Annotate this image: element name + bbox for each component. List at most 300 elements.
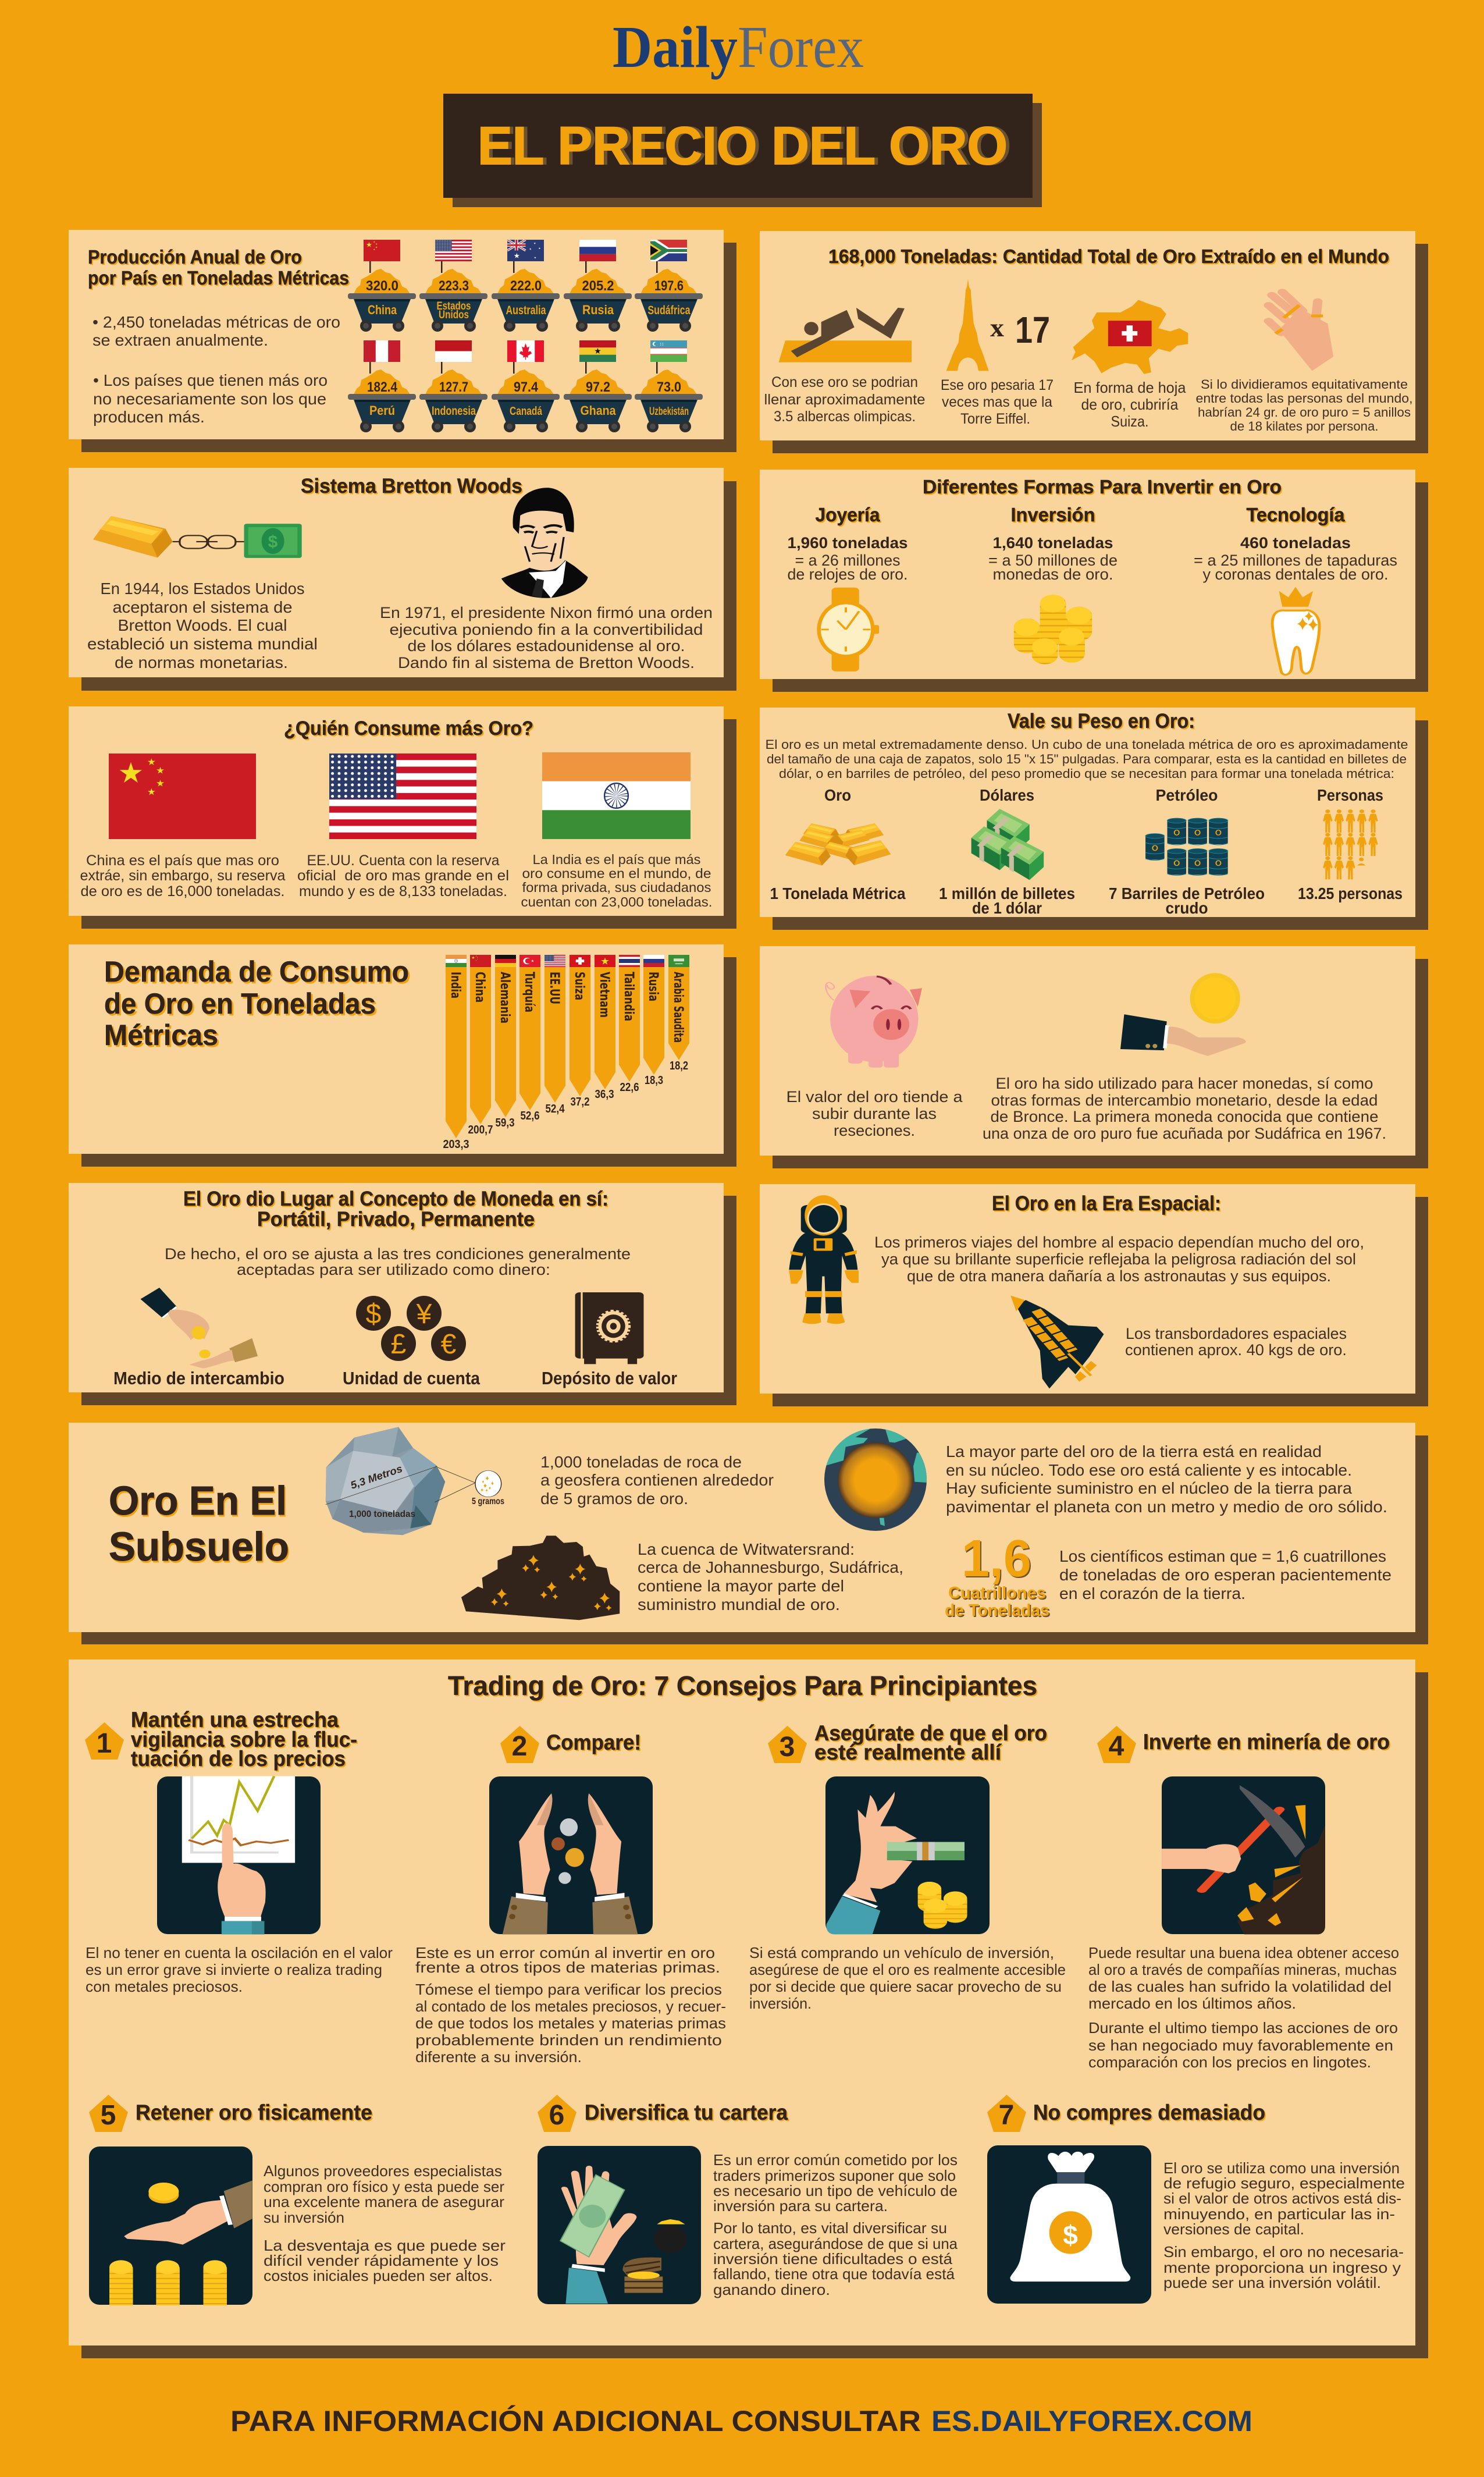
panel: diferentes formas de invertir <box>760 470 1428 692</box>
bar: Vietnam <box>595 955 615 1101</box>
tip 4 text: Puede resultar una buena idea obtener acceso <box>1088 1944 1399 1961</box>
tip 5 text: su inversión <box>264 2209 344 2226</box>
cart: China: 320.0 <box>366 278 398 294</box>
badge 3: 3 <box>780 1732 795 1762</box>
badge 7: 7 <box>999 2100 1014 2131</box>
label: depósito de valor: Depósito de valor <box>542 1368 677 1388</box>
bar: Rusia: Rusia <box>646 972 660 1001</box>
cart: China <box>348 240 416 332</box>
text block: 1944: de normas monetarias. <box>115 653 288 671</box>
bar: Arabia Saudita: Arabia Saudita <box>671 972 685 1043</box>
icon: currency coins: ¥ <box>416 1299 432 1330</box>
text block: EE.UU.: mundo y es de 8,133 toneladas. <box>299 883 507 900</box>
column: tecnología: = a 25 millones de tapaduras <box>1194 552 1397 569</box>
text block: transbordadores: contienen aprox. 40 kgs de oro. <box>1125 1341 1347 1359</box>
bar: Vietnam: Vietnam <box>597 972 611 1018</box>
cart: Uzbekistán: 73.0 <box>657 379 681 395</box>
text block: núcleo: en su núcleo. Todo ese oro está caliente y es intocable. <box>946 1461 1352 1479</box>
icon: earth with gold core <box>823 1427 930 1531</box>
text block: viajes al espacio <box>874 1234 1364 1285</box>
tip 7 text: puede ser una inversión volátil. <box>1163 2274 1381 2291</box>
label: x 17: x <box>990 314 1004 342</box>
heading: concepto de moneda: El Oro dio Lugar al Concepto de Moneda en sí: <box>183 1188 608 1210</box>
bar: Turquía: 52,6 <box>520 1110 540 1122</box>
bar: Turquía <box>519 955 540 1122</box>
column: oro <box>770 786 906 902</box>
cart: Canadá: Canadá <box>510 405 543 418</box>
text block: 1944: estableció un sistema mundial <box>87 635 318 653</box>
cart: Australia: Australia <box>506 304 546 317</box>
tip 7 text: mente proporciona un ingreso y <box>1163 2259 1401 2276</box>
text block: densidad del oro: del tamaño de una caja de zapatos, solo 15 "x 15" pulgadas. Para comparar, esta es la cantidad en billetes de <box>767 752 1407 766</box>
tip 7 text: minuyendo, en particular las in- <box>1163 2205 1395 2223</box>
bar: India: India <box>448 972 462 998</box>
text block: Witwatersrand: suministro mundial de oro. <box>638 1595 840 1614</box>
column: joyería: 1,960 toneladas <box>788 534 908 552</box>
badge 7 <box>987 2095 1026 2132</box>
text block: 1944: aceptaron el sistema de <box>113 598 292 616</box>
heading: quién consume: ¿Quién Consume más Oro? <box>284 717 533 740</box>
panel: valor del oro y monedas <box>760 946 1428 1168</box>
cart: Rusia <box>564 240 632 332</box>
icon: rock with 5 grams of gold: 5 gramos <box>472 1497 504 1506</box>
text block: Witwatersrand: cerca de Johannesburgo, Sudáfrica, <box>638 1558 903 1576</box>
text block: 1971 <box>380 604 713 671</box>
heading: demanda de consumo: de Oro en Toneladas <box>104 987 376 1020</box>
text block: Suiza: de oro, cubriría <box>1081 396 1179 413</box>
icon: hands and coins <box>489 1776 653 1934</box>
bar: India: 203,3 <box>443 1138 469 1151</box>
badge 6 <box>538 2095 576 2132</box>
column: petróleo: 7 Barriles de Petróleo <box>1109 884 1265 902</box>
text block: núcleo: Hay suficiente suministro en el núcleo de la tierra para <box>946 1479 1352 1497</box>
label: x 17: 17 <box>1015 309 1050 351</box>
text block: Witwatersrand <box>638 1540 903 1614</box>
panel: 168,000 toneladas <box>760 231 1428 453</box>
text block: recesiones: subir durante las <box>812 1105 937 1122</box>
cart: Perú <box>348 340 416 432</box>
text block: 1944: En 1944, los Estados Unidos <box>100 580 305 598</box>
tip 6 text: ganando dinero. <box>713 2281 830 2298</box>
column: inversión: Inversión <box>1011 504 1095 525</box>
icon: piggy bank <box>825 976 922 1068</box>
heading: vale su peso: Vale su Peso en Oro: <box>1008 710 1195 733</box>
panel: oro en la era espacial <box>760 1184 1428 1406</box>
tip 2 <box>415 1726 726 2066</box>
icon: portrait of Nixon <box>501 488 588 598</box>
column: dólares: Dólares <box>980 786 1034 804</box>
column: joyería: = a 26 millones <box>795 552 901 569</box>
icon: gold bar chained to dollar <box>93 516 302 558</box>
column: tecnología: 460 toneladas <box>1240 534 1351 552</box>
title banner <box>443 94 1042 207</box>
tip 2 text: Tómese el tiempo para verificar los precios <box>415 1981 722 1998</box>
text block: Torre Eiffel <box>941 377 1054 427</box>
bar: Arabia Saudita <box>668 955 689 1072</box>
tip 5 text: difícil vender rápidamente y los <box>264 2252 499 2269</box>
tip 5 text: una excelente manera de asegurar <box>264 2193 504 2211</box>
text block: tres condiciones <box>165 1245 631 1278</box>
column: dólares: de 1 dólar <box>972 899 1042 917</box>
text block: EE.UU.: EE.UU. Cuenta con la reserva <box>307 852 500 869</box>
logo: DailyForex <box>613 15 864 80</box>
heading: producción anual: Producción Anual de Oro <box>88 246 302 268</box>
icon: rock with 5 grams of gold <box>326 1427 504 1535</box>
cart: Indonesia: 127.7 <box>439 379 468 395</box>
tip 1 title: Mantén una estrecha <box>131 1708 339 1732</box>
text block: producción bullets: • 2,450 toneladas métricas de oro <box>92 313 340 331</box>
cart: Estados Unidos: Unidos <box>439 309 469 321</box>
tip 4 text <box>1088 1944 1399 2071</box>
bar: India <box>443 955 469 1151</box>
column: joyería: de relojes de oro. <box>788 566 908 583</box>
text block: China: de oro es de 16,000 toneladas. <box>80 883 285 900</box>
chart: mine carts by country <box>348 240 703 432</box>
text block: científicos: de toneladas de oro esperan pacientemente <box>1059 1566 1392 1584</box>
icon: finger on price chart <box>157 1776 321 1934</box>
text block: monedas: El oro ha sido utilizado para hacer monedas, sí como <box>996 1075 1373 1092</box>
label: medio de intercambio: Medio de intercambio <box>113 1368 284 1388</box>
cart: Indonesia <box>419 340 487 432</box>
text block: densidad del oro: dólar, o en barriles de petróleo, del peso promedio que se necesitan para formar una tonelada métrica: <box>779 766 1394 781</box>
text block: China <box>80 852 286 900</box>
tip 4 text: mercado en los últimos años. <box>1088 1995 1296 2012</box>
footer call to action <box>230 2405 1252 2437</box>
tip 2 text: al contado de los metales preciosos, y recuer- <box>415 1998 726 2015</box>
tip 2 text: Este es un error común al invertir en oro <box>415 1944 715 1961</box>
cart: Ghana <box>564 340 632 432</box>
icon: gold bars <box>785 823 891 865</box>
flag: India <box>542 752 691 839</box>
heading: oro en el subsuelo: Subsuelo <box>109 1524 289 1569</box>
tip 6 text: traders primerizos suponer que solo <box>713 2167 956 2184</box>
icon: currency coins: € <box>441 1329 457 1360</box>
cart: Estados Unidos: Estados <box>436 300 471 312</box>
panel: concepto de moneda <box>69 1183 736 1405</box>
cart: Perú: 182.4 <box>367 379 398 395</box>
bar: Tailandia <box>619 955 640 1094</box>
text block: China: China es el país que mas oro <box>86 852 279 869</box>
bar: Arabia Saudita: 18,2 <box>670 1060 688 1072</box>
text block: geosfera <box>540 1453 774 1508</box>
cart: China: China <box>368 303 397 317</box>
tip 6 text: fallando, tiene otra que todavía está <box>713 2265 955 2283</box>
tip 6 title: Diversifica tu cartera <box>585 2101 788 2124</box>
text block: recesiones <box>787 1088 963 1139</box>
bar: Rusia: 18,3 <box>645 1074 663 1087</box>
text block: 1944: Bretton Woods. El cual <box>118 616 287 634</box>
column: inversión: 1,640 toneladas <box>992 534 1113 552</box>
heading: concepto de moneda: Portátil, Privado, Permanente <box>257 1208 535 1231</box>
cart: Estados Unidos <box>419 240 487 332</box>
tip 6 text <box>713 2151 958 2298</box>
tip 7 <box>987 2095 1405 2304</box>
column: inversión: = a 50 millones de <box>988 552 1118 569</box>
bar: Suiza <box>570 955 590 1108</box>
tip 3 <box>749 1721 1066 2012</box>
text block: anillos: habrían 24 gr. de oro puro = 5 anillos <box>1198 405 1411 420</box>
text block: geosfera: de 5 gramos de oro. <box>540 1490 688 1508</box>
cart: Australia <box>492 240 560 332</box>
logo: DailyForex: Forex <box>738 15 864 80</box>
tip 7 text: Sin embargo, el oro no necesaria- <box>1163 2243 1404 2261</box>
tip 5 <box>89 2095 506 2305</box>
text block: anillos: entre todas las personas del mundo, <box>1196 391 1412 406</box>
heading: oro en el subsuelo: Oro En El <box>109 1478 287 1523</box>
icon: money bag: $ <box>1063 2220 1078 2250</box>
panel: producción anual <box>69 230 736 452</box>
icon: oil barrels <box>1145 818 1228 875</box>
flag: China <box>109 754 256 839</box>
tip 3 title <box>814 1721 1047 1764</box>
text block: monedas <box>983 1075 1386 1142</box>
icon: map of Switzerland <box>1072 300 1188 374</box>
bar: China: China <box>472 972 487 1003</box>
text block: producción bullets <box>92 313 340 426</box>
column: joyería: Joyería <box>816 504 880 525</box>
icon: hand holding coin above stacks <box>89 2147 252 2305</box>
cart: Canadá <box>492 340 560 432</box>
tip 7 text: de refugio seguro, especialmente <box>1163 2174 1405 2192</box>
icon: Eiffel tower <box>946 279 989 371</box>
tip 4 title: Inverte en minería de oro <box>1143 1730 1390 1754</box>
tip 1 title: vigilancia sobre la fluc- <box>131 1728 357 1751</box>
column: petróleo: Petróleo <box>1155 786 1218 804</box>
cart: Estados Unidos: 223.3 <box>439 278 469 294</box>
text block: viajes al espacio: ya que su brillante superficie reflejaba la peligrosa radiación del sol <box>881 1250 1356 1268</box>
panel: vale su peso en oro <box>760 708 1428 930</box>
bar: Suiza: Suiza <box>572 972 586 1000</box>
footer call to action: ES.DAILYFOREX.COM <box>931 2405 1252 2437</box>
column: oro: 1 Tonelada Métrica <box>770 884 906 902</box>
cart: Perú: Perú <box>369 403 395 418</box>
bar: EE.UU: 52,4 <box>546 1103 565 1115</box>
tip 6 text: es necesario un tipo de vehículo de <box>713 2182 958 2199</box>
panel: sistema Bretton Woods <box>69 468 736 691</box>
stat: 1,6 cuatrillones de toneladas: Cuatrillones <box>948 1584 1046 1602</box>
tip 1 text: con metales preciosos. <box>86 1978 243 1995</box>
tip 2 text: diferente a su inversión. <box>415 2048 582 2066</box>
text block: transbordadores <box>1125 1325 1347 1359</box>
text block: 1971: de los dólares estadounidense al oro. <box>407 637 685 655</box>
cart: Ghana: Ghana <box>581 403 616 418</box>
text block: anillos <box>1196 377 1412 433</box>
icon: swimmer in pool <box>778 308 912 363</box>
text block: monedas: una onza de oro puro fue acuñada por Sudáfrica en 1967. <box>983 1125 1386 1142</box>
column: joyería <box>788 504 908 583</box>
tip 6 <box>538 2095 958 2304</box>
column: oro: Oro <box>824 786 851 804</box>
badge 6: 6 <box>549 2100 564 2131</box>
cart: Uzbekistán <box>635 340 703 432</box>
icon: people <box>1323 809 1378 879</box>
label: x 17 <box>990 309 1050 351</box>
tip 5 text: costos iniciales pueden ser altos. <box>264 2267 493 2284</box>
tip 7 text: versiones de capital. <box>1163 2220 1304 2238</box>
tip 6 text: inversión para su cartera. <box>713 2197 888 2215</box>
text block: albercas <box>764 374 925 425</box>
text block: geosfera: a geosfera contienen alrededor <box>540 1471 774 1489</box>
text block: viajes al espacio: que de otra manera dañaría a los astronautas y sus equipos. <box>907 1267 1331 1285</box>
column: personas <box>1298 786 1403 902</box>
tip 6 text: cartera, asegurándose de que si una <box>713 2235 958 2252</box>
text block: tres condiciones: aceptadas para ser utilizado como dinero: <box>237 1261 550 1278</box>
icon: stacks of dollars <box>971 809 1044 880</box>
text block: núcleo <box>946 1442 1387 1516</box>
text block: EE.UU. <box>297 852 509 900</box>
icon: gold coins <box>1014 595 1092 664</box>
heading: concepto de moneda <box>183 1188 608 1231</box>
tip 7 text: El oro se utiliza como una inversión <box>1163 2159 1400 2177</box>
tip 6 text: inversión tiene dificultades o está <box>713 2250 953 2268</box>
text block: Suiza: En forma de hoja <box>1074 379 1186 396</box>
cart: Ghana: 97.2 <box>586 379 610 395</box>
text block: India: oro consume en el mundo, de <box>522 866 711 881</box>
column: tecnología: y coronas dentales de oro. <box>1203 566 1388 583</box>
text block: albercas: llenar aproximadamente <box>764 392 925 408</box>
tip 2 text: probablemente brinden un rendimiento <box>415 2031 722 2049</box>
icon: rock with 5 grams of gold: 5,3 Metros <box>349 1463 404 1491</box>
tip 6 text: Por lo tanto, es vital diversificar su <box>713 2219 947 2237</box>
tip 1 text <box>86 1944 393 1995</box>
text block: 1971: ejecutiva poniendo fin a la convertibilidad <box>390 621 703 638</box>
text block: Suiza <box>1074 379 1186 430</box>
panel: oro en el subsuelo <box>69 1423 1428 1644</box>
heading: producción anual <box>88 246 349 289</box>
text block: 1971: Dando fin al sistema de Bretton Woods. <box>398 654 695 671</box>
heading: demanda de consumo: Métricas <box>104 1019 218 1051</box>
icon: currency coins <box>356 1296 466 1361</box>
icon: space shuttle <box>1010 1296 1104 1388</box>
text block: Witwatersrand: La cuenca de Witwatersrand: <box>638 1540 855 1558</box>
tip 3 text: por si decide que quiere sacar provecho de su <box>749 1978 1062 1995</box>
title banner: EL PRECIO DEL ORO <box>478 116 1008 176</box>
text block: Torre Eiffel: Ese oro pesaria 17 <box>941 377 1054 393</box>
tip 2 title: Compare! <box>546 1730 641 1754</box>
tip 1 title: tuación de los precios <box>131 1747 346 1771</box>
text block: núcleo: La mayor parte del oro de la tierra está en realidad <box>946 1442 1322 1460</box>
cart: Indonesia: Indonesia <box>432 404 476 418</box>
tip 2 text: frente a otros tipos de materias primas. <box>415 1959 720 1976</box>
text block: núcleo: pavimentar el planeta con un metro y medio de oro sólido. <box>946 1498 1387 1516</box>
tip 6 text: Es un error común cometido por los <box>713 2151 958 2169</box>
panel: demanda de consumo <box>69 944 736 1167</box>
icon: hands exchanging coins <box>140 1288 258 1369</box>
tip 4 text: se han negociado muy favorablemente en <box>1088 2037 1393 2054</box>
bar: Alemania: Alemania <box>497 972 512 1024</box>
tip 4 text: al oro a través de compañías mineras, muchas <box>1088 1961 1397 1978</box>
tip 3 title: esté realmente allí <box>814 1740 1002 1764</box>
text block: albercas: 3.5 albercas olimpicas. <box>774 408 916 425</box>
tip 7 text <box>1163 2159 1405 2291</box>
text block: recesiones: El valor del oro tiende a <box>787 1088 963 1106</box>
column: petróleo <box>1109 786 1265 917</box>
tip 5 text <box>264 2162 506 2284</box>
bar: China: 200,7 <box>468 1124 493 1136</box>
text block: India: forma privada, sus ciudadanos <box>522 880 711 895</box>
bar: Tailandia: Tailandia <box>621 972 636 1021</box>
text block: anillos: Si lo dividieramos equitativamente <box>1201 377 1408 392</box>
badge 1: 1 <box>97 1728 112 1759</box>
column: tecnología <box>1194 504 1397 583</box>
text block: 1944 <box>87 580 318 671</box>
icon: hand with bill, pot and chest <box>538 2146 701 2304</box>
tip 3 text: asegúrese de que el oro es realmente accesible <box>749 1961 1066 1978</box>
text block: China: extráe, sin embargo, su reserva <box>80 868 286 884</box>
badge 5 <box>89 2095 128 2132</box>
cart: Rusia: Rusia <box>582 303 614 317</box>
badge 2: 2 <box>512 1731 527 1762</box>
icon: gold bar chained to dollar: $ <box>268 532 278 552</box>
badge 4: 4 <box>1109 1731 1124 1762</box>
tip 7 text: si el valor de otros activos está dis- <box>1163 2190 1401 2207</box>
tip 4 <box>1088 1726 1399 2071</box>
stat: 1,6 cuatrillones de toneladas: de Toneladas <box>945 1601 1049 1620</box>
bar: EE.UU <box>545 955 565 1115</box>
column: dólares <box>939 786 1075 917</box>
badge 2 <box>500 1726 539 1763</box>
cart: Canadá: 97.4 <box>514 379 539 395</box>
text block: densidad del oro: El oro es un metal extremadamente denso. Un cubo de una tonelada métrica de oro es aproximadamente <box>766 737 1408 752</box>
text block: producción bullets: se extraen anualmente. <box>92 331 268 349</box>
icon: hand with rings <box>1269 292 1333 371</box>
text block: viajes al espacio: Los primeros viajes del hombre al espacio dependían mucho del oro, <box>874 1234 1364 1251</box>
text block: Witwatersrand: contiene la mayor parte del <box>638 1577 844 1595</box>
text block: albercas: Con ese oro se podrian <box>771 374 918 390</box>
badge 5: 5 <box>101 2100 116 2131</box>
heading: Bretton Woods: Sistema Bretton Woods <box>301 475 522 497</box>
stat: 1,6 cuatrillones de toneladas <box>945 1530 1049 1620</box>
column: personas: 13.25 personas <box>1298 884 1403 902</box>
icon: pickaxe mining gold <box>1162 1776 1325 1934</box>
cart: Rusia: 205.2 <box>582 278 614 294</box>
text block: India: cuentan con 23,000 toneladas. <box>521 894 712 909</box>
bar: Alemania <box>495 955 516 1129</box>
text block: monedas: otras formas de intercambio monetario, desde la edad <box>991 1092 1378 1109</box>
tip 3 text <box>749 1944 1066 2012</box>
heading: era espacial: El Oro en la Era Espacial: <box>992 1192 1221 1215</box>
heading: oro en el subsuelo <box>109 1478 289 1569</box>
bar: Vietnam: 36,3 <box>595 1088 614 1101</box>
text block: India: La India es el país que más <box>533 852 700 867</box>
cart: Australia: 222.0 <box>510 278 542 294</box>
tip 1 text: es un error grave si invierte o realiza trading <box>86 1961 382 1978</box>
stat: 1,6 cuatrillones de toneladas: 1,6 <box>962 1530 1031 1588</box>
column: inversión <box>988 504 1118 583</box>
tip 7 title: No compres demasiado <box>1033 2101 1265 2124</box>
icon: safe <box>575 1292 643 1364</box>
heading: 168,000 toneladas: 168,000 Toneladas: Cantidad Total de Oro Extraído en el Mundo <box>828 246 1389 267</box>
bar: Rusia <box>643 955 664 1087</box>
footer call to action: PARA INFORMACIÓN ADICIONAL CONSULTAR <box>230 2405 921 2437</box>
tip 5 text: La desventaja es que puede ser <box>264 2237 506 2254</box>
bar: Alemania: 59,3 <box>496 1117 514 1129</box>
text block: recesiones: reseciones. <box>834 1122 915 1139</box>
text block: tres condiciones: De hecho, el oro se ajusta a las tres condiciones generalmente <box>165 1245 631 1263</box>
icon: astronaut <box>789 1195 859 1324</box>
column: inversión: monedas de oro. <box>992 566 1113 583</box>
tip 5 text: compran oro físico y esta puede ser <box>264 2178 504 2195</box>
text block: transbordadores: Los transbordadores espaciales <box>1126 1325 1347 1342</box>
icon: currency coins: £ <box>391 1329 406 1360</box>
tip 2 text <box>415 1944 726 2066</box>
column: dólares: 1 millón de billetes <box>939 884 1075 902</box>
cart: Sudáfrica: 197.6 <box>654 278 684 294</box>
text block: científicos: en el corazón de la tierra. <box>1059 1584 1245 1602</box>
text block: producción bullets: producen más. <box>93 408 205 426</box>
badge 3 <box>768 1726 807 1763</box>
tip 1 title <box>131 1708 357 1771</box>
